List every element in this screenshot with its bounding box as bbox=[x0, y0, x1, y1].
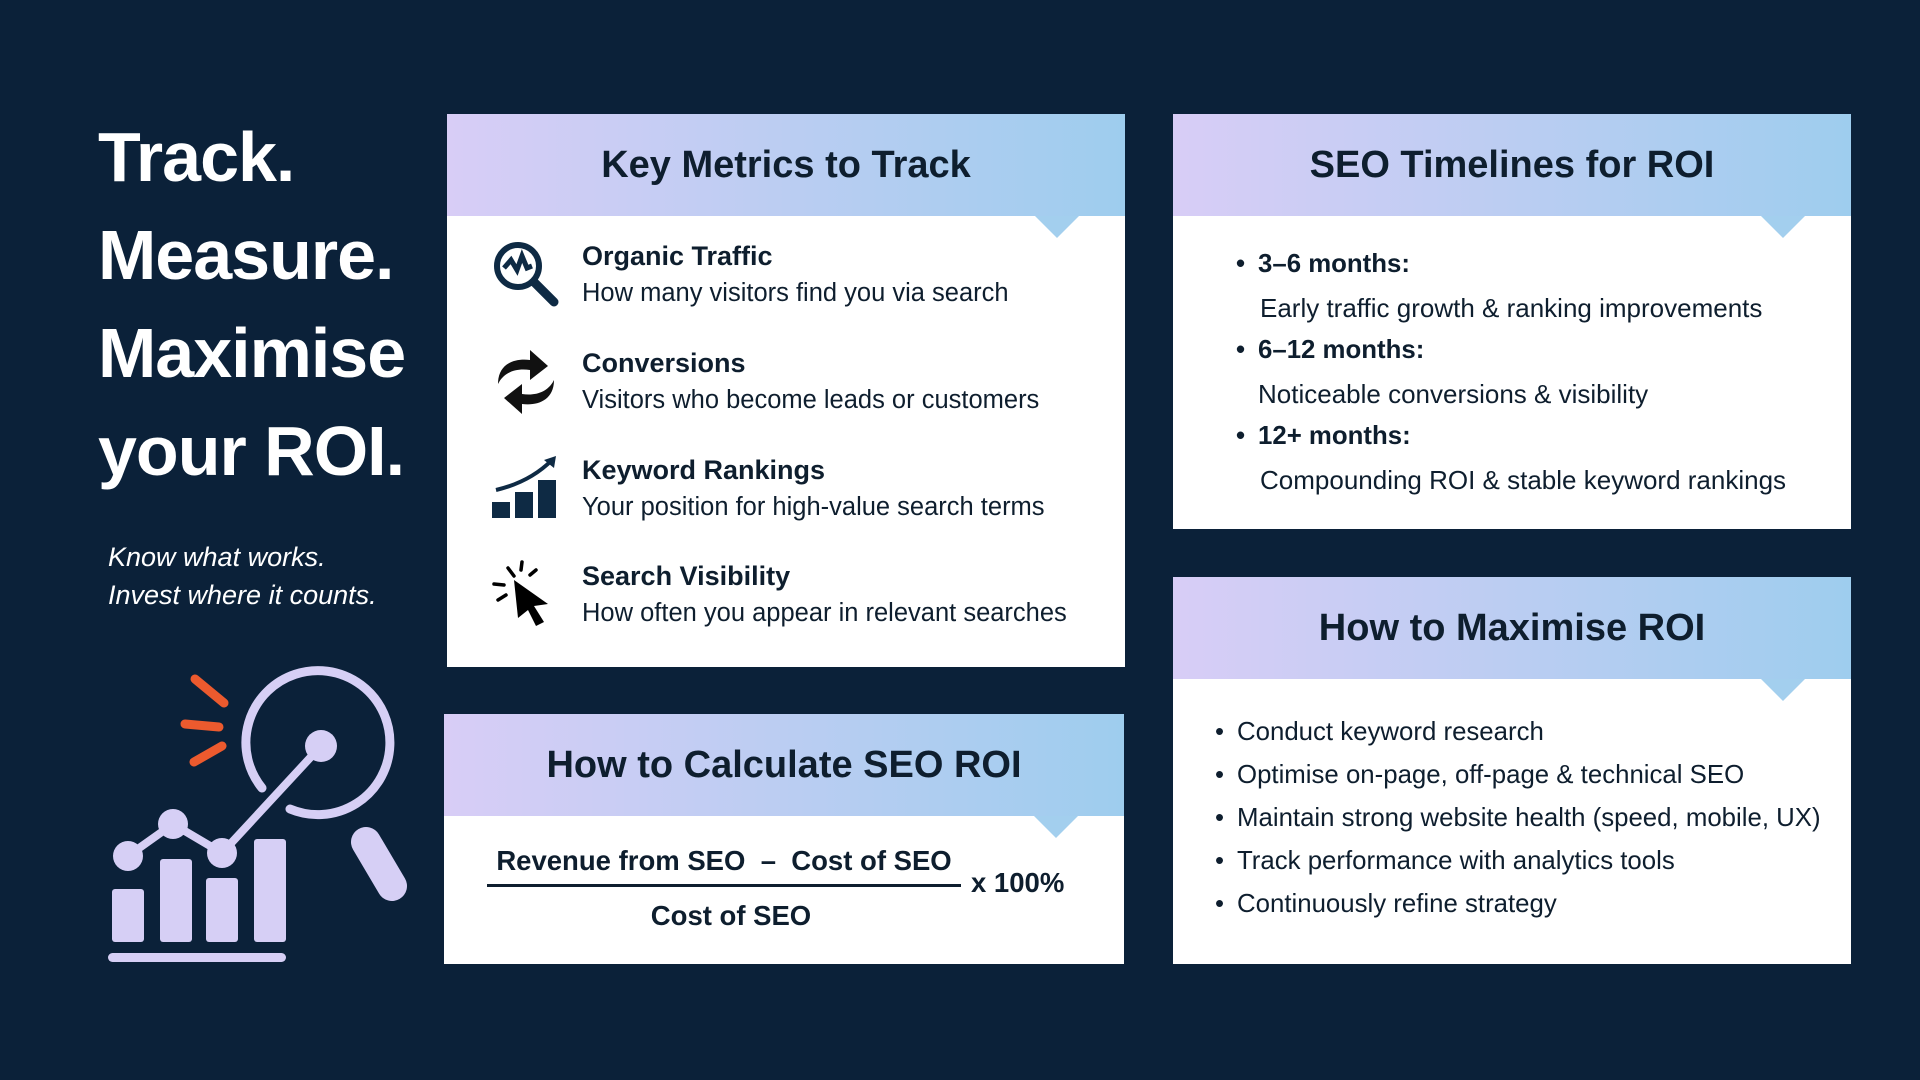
text: search visibility: Search Visibility bbox=[582, 561, 790, 591]
panel: key metrics: How often you appear in relevant searches bbox=[582, 599, 1067, 627]
subtitle: Invest where it counts. bbox=[108, 580, 377, 610]
panel: key metrics: Visitors who become leads or customers bbox=[582, 386, 1039, 414]
header: calculate bbox=[444, 714, 1124, 816]
header: maximise bbox=[1173, 577, 1851, 679]
header: maximise: How to Maximise ROI bbox=[1319, 606, 1705, 648]
timeline list: 6–12 months: bbox=[1258, 336, 1424, 364]
illustration: chart with magnifier bbox=[108, 666, 407, 962]
maximise list: Track performance with analytics tools bbox=[1237, 847, 1675, 875]
timeline list: Noticeable conversions & visibility bbox=[1258, 379, 1648, 409]
maximise list: Optimise on-page, off-page & technical SEO bbox=[1237, 761, 1744, 789]
title: Measure. bbox=[98, 216, 393, 294]
panel: timelines bbox=[1173, 114, 1851, 529]
header: calculate: How to Calculate SEO ROI bbox=[546, 744, 1022, 786]
panel: key metrics: How many visitors find you via search bbox=[582, 279, 1009, 307]
icon: rising bars bbox=[492, 456, 556, 518]
panel: maximise ROI bbox=[1173, 577, 1851, 964]
timeline list: Early traffic growth & ranking improvements bbox=[1260, 293, 1762, 323]
maximise list: Maintain strong website health (speed, mobile, UX) bbox=[1237, 804, 1821, 832]
title: Maximise bbox=[98, 314, 405, 392]
header: key metrics bbox=[447, 114, 1125, 216]
subtitle: Know what works. bbox=[108, 542, 326, 572]
formula: Cost of SEO bbox=[651, 900, 811, 931]
text: keyword rankings: Keyword Rankings bbox=[582, 455, 825, 485]
text: organic traffic: Organic Traffic bbox=[582, 241, 773, 271]
title: Track. bbox=[98, 118, 294, 196]
maximise list bbox=[1216, 718, 1821, 918]
formula bbox=[487, 845, 1064, 931]
header: timelines: SEO Timelines for ROI bbox=[1310, 144, 1714, 186]
formula: Revenue from SEO – Cost of SEO bbox=[496, 845, 952, 876]
icon: magnifier bbox=[494, 242, 558, 306]
maximise list: Continuously refine strategy bbox=[1237, 890, 1557, 918]
panel: key metrics bbox=[447, 114, 1125, 667]
maximise list: Conduct keyword research bbox=[1237, 718, 1544, 746]
timeline list: 12+ months: bbox=[1258, 422, 1411, 450]
panel: calculate ROI bbox=[444, 714, 1124, 964]
timeline list bbox=[1236, 250, 1786, 495]
header: key metrics: Key Metrics to Track bbox=[601, 144, 971, 186]
title bbox=[98, 118, 405, 490]
header: timelines bbox=[1173, 114, 1851, 216]
timeline list: 3–6 months: bbox=[1258, 250, 1410, 278]
formula: x 100% bbox=[971, 867, 1064, 898]
icon: refresh arrows bbox=[498, 350, 554, 414]
panel: key metrics: Your position for high-value search terms bbox=[582, 493, 1045, 521]
text: conversions: Conversions bbox=[582, 348, 746, 378]
subtitle bbox=[108, 542, 377, 610]
icon: cursor click bbox=[492, 560, 548, 626]
timeline list: Compounding ROI & stable keyword rankings bbox=[1260, 465, 1786, 495]
title: your ROI. bbox=[98, 412, 404, 490]
